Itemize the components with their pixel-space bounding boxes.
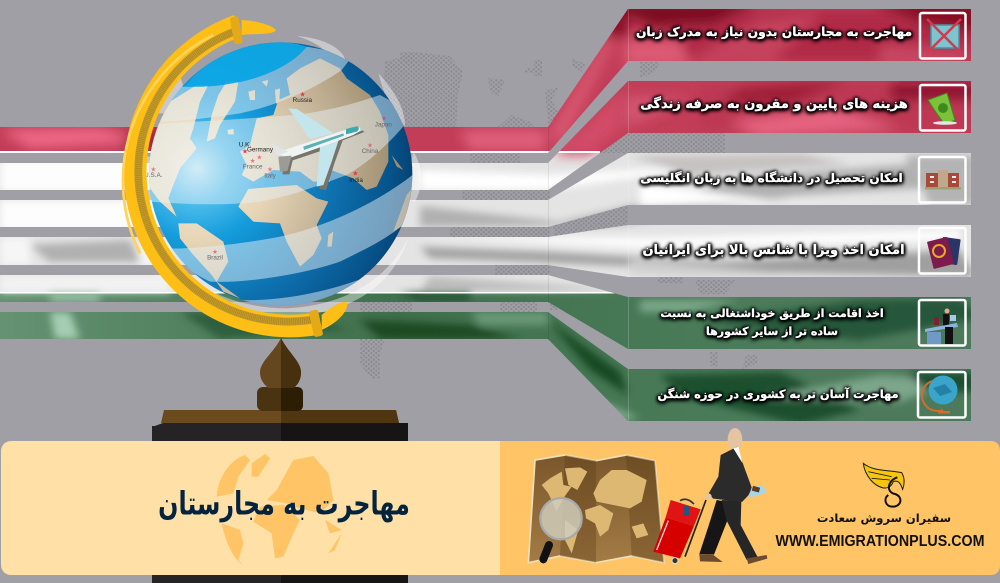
icon frames (918, 13, 966, 418)
brass meridian ring (123, 16, 347, 337)
city stars: ★ (381, 115, 387, 123)
stand base plate (152, 426, 408, 583)
icon: banknote (928, 93, 957, 125)
city labels: U.S.A. (144, 172, 163, 179)
icon: university building (925, 170, 961, 190)
icon: traveller (699, 428, 767, 564)
city labels: France (243, 164, 263, 171)
text: benefit 4: امکان اخذ ویزا با شانس بالا برای ایرانیان (642, 243, 905, 258)
city stars: ★ (267, 165, 273, 173)
flag ribbon bands (0, 0, 1000, 433)
globe (140, 42, 417, 315)
stand finial (260, 338, 301, 388)
text: benefit 5 (657, 305, 887, 343)
dotted world map background (360, 52, 757, 379)
light stripes (140, 47, 417, 315)
text: benefit 6: مهاجرت آسان تر به کشوری در حوزه شنگن (657, 387, 899, 401)
city stars (150, 91, 387, 256)
text: benefit 3: امکان تحصیل در دانشگاه ها به زبان انگلیسی (640, 171, 903, 185)
city stars: ★ (150, 165, 156, 173)
brand name: سفیران سروش سعادت (817, 511, 951, 525)
icon: language certificate crossed out (927, 19, 961, 53)
stand collar (257, 387, 303, 411)
text: benefit 1: مهاجرت به مجارستان بدون نیاز به مدرک زبان (636, 25, 912, 39)
city stars: ★ (352, 170, 358, 178)
footer brand url: WWW.EMIGRATIONPLUS.COM (776, 533, 984, 550)
text: benefit 2: هزینه های پایین و مقرون به صرفه زندگی (640, 97, 908, 112)
icon: office desk (925, 308, 958, 344)
globe stand (152, 338, 408, 583)
logo: winged bird (863, 463, 904, 507)
plane (272, 108, 364, 190)
city labels: India (349, 177, 363, 184)
icon: magnifying glass (540, 498, 582, 559)
text: benefit 5: اخذ اقامت از طریق خوداشتغالی به نسبت (660, 307, 884, 320)
icon: folded map (528, 455, 664, 563)
city labels (144, 97, 392, 262)
city stars: ★ (256, 153, 262, 161)
footer illustration (528, 428, 904, 564)
panel: title card (1, 441, 521, 575)
city labels: Japan (375, 121, 392, 128)
city labels: China (362, 148, 379, 155)
city labels: U.K. (239, 141, 251, 148)
globe glass halo (133, 36, 421, 316)
icon: faint world map (217, 454, 342, 566)
city labels: Germany (247, 147, 274, 154)
stand wood base (161, 410, 399, 423)
icon: passports (927, 237, 961, 269)
city stars: ★ (367, 141, 373, 149)
city labels: Russia (293, 97, 312, 104)
city stars: ★ (212, 248, 218, 256)
cyan polar cap (185, 42, 307, 87)
ring clamps (230, 16, 243, 45)
city labels: Brazil (207, 255, 223, 262)
panel: brand card (500, 441, 1000, 575)
title: مهاجرت به مجارستان (158, 486, 410, 523)
continents (145, 58, 415, 298)
city stars: ★ (300, 91, 306, 99)
icon: suitcase (653, 499, 706, 564)
city stars: ★ (250, 157, 256, 165)
icon: small globe (922, 376, 958, 414)
city labels: Italy (264, 172, 277, 179)
text: benefit 5: ساده تر از سایر کشورها (706, 325, 838, 338)
ring tips (242, 20, 276, 35)
city stars: ★ (242, 148, 248, 156)
